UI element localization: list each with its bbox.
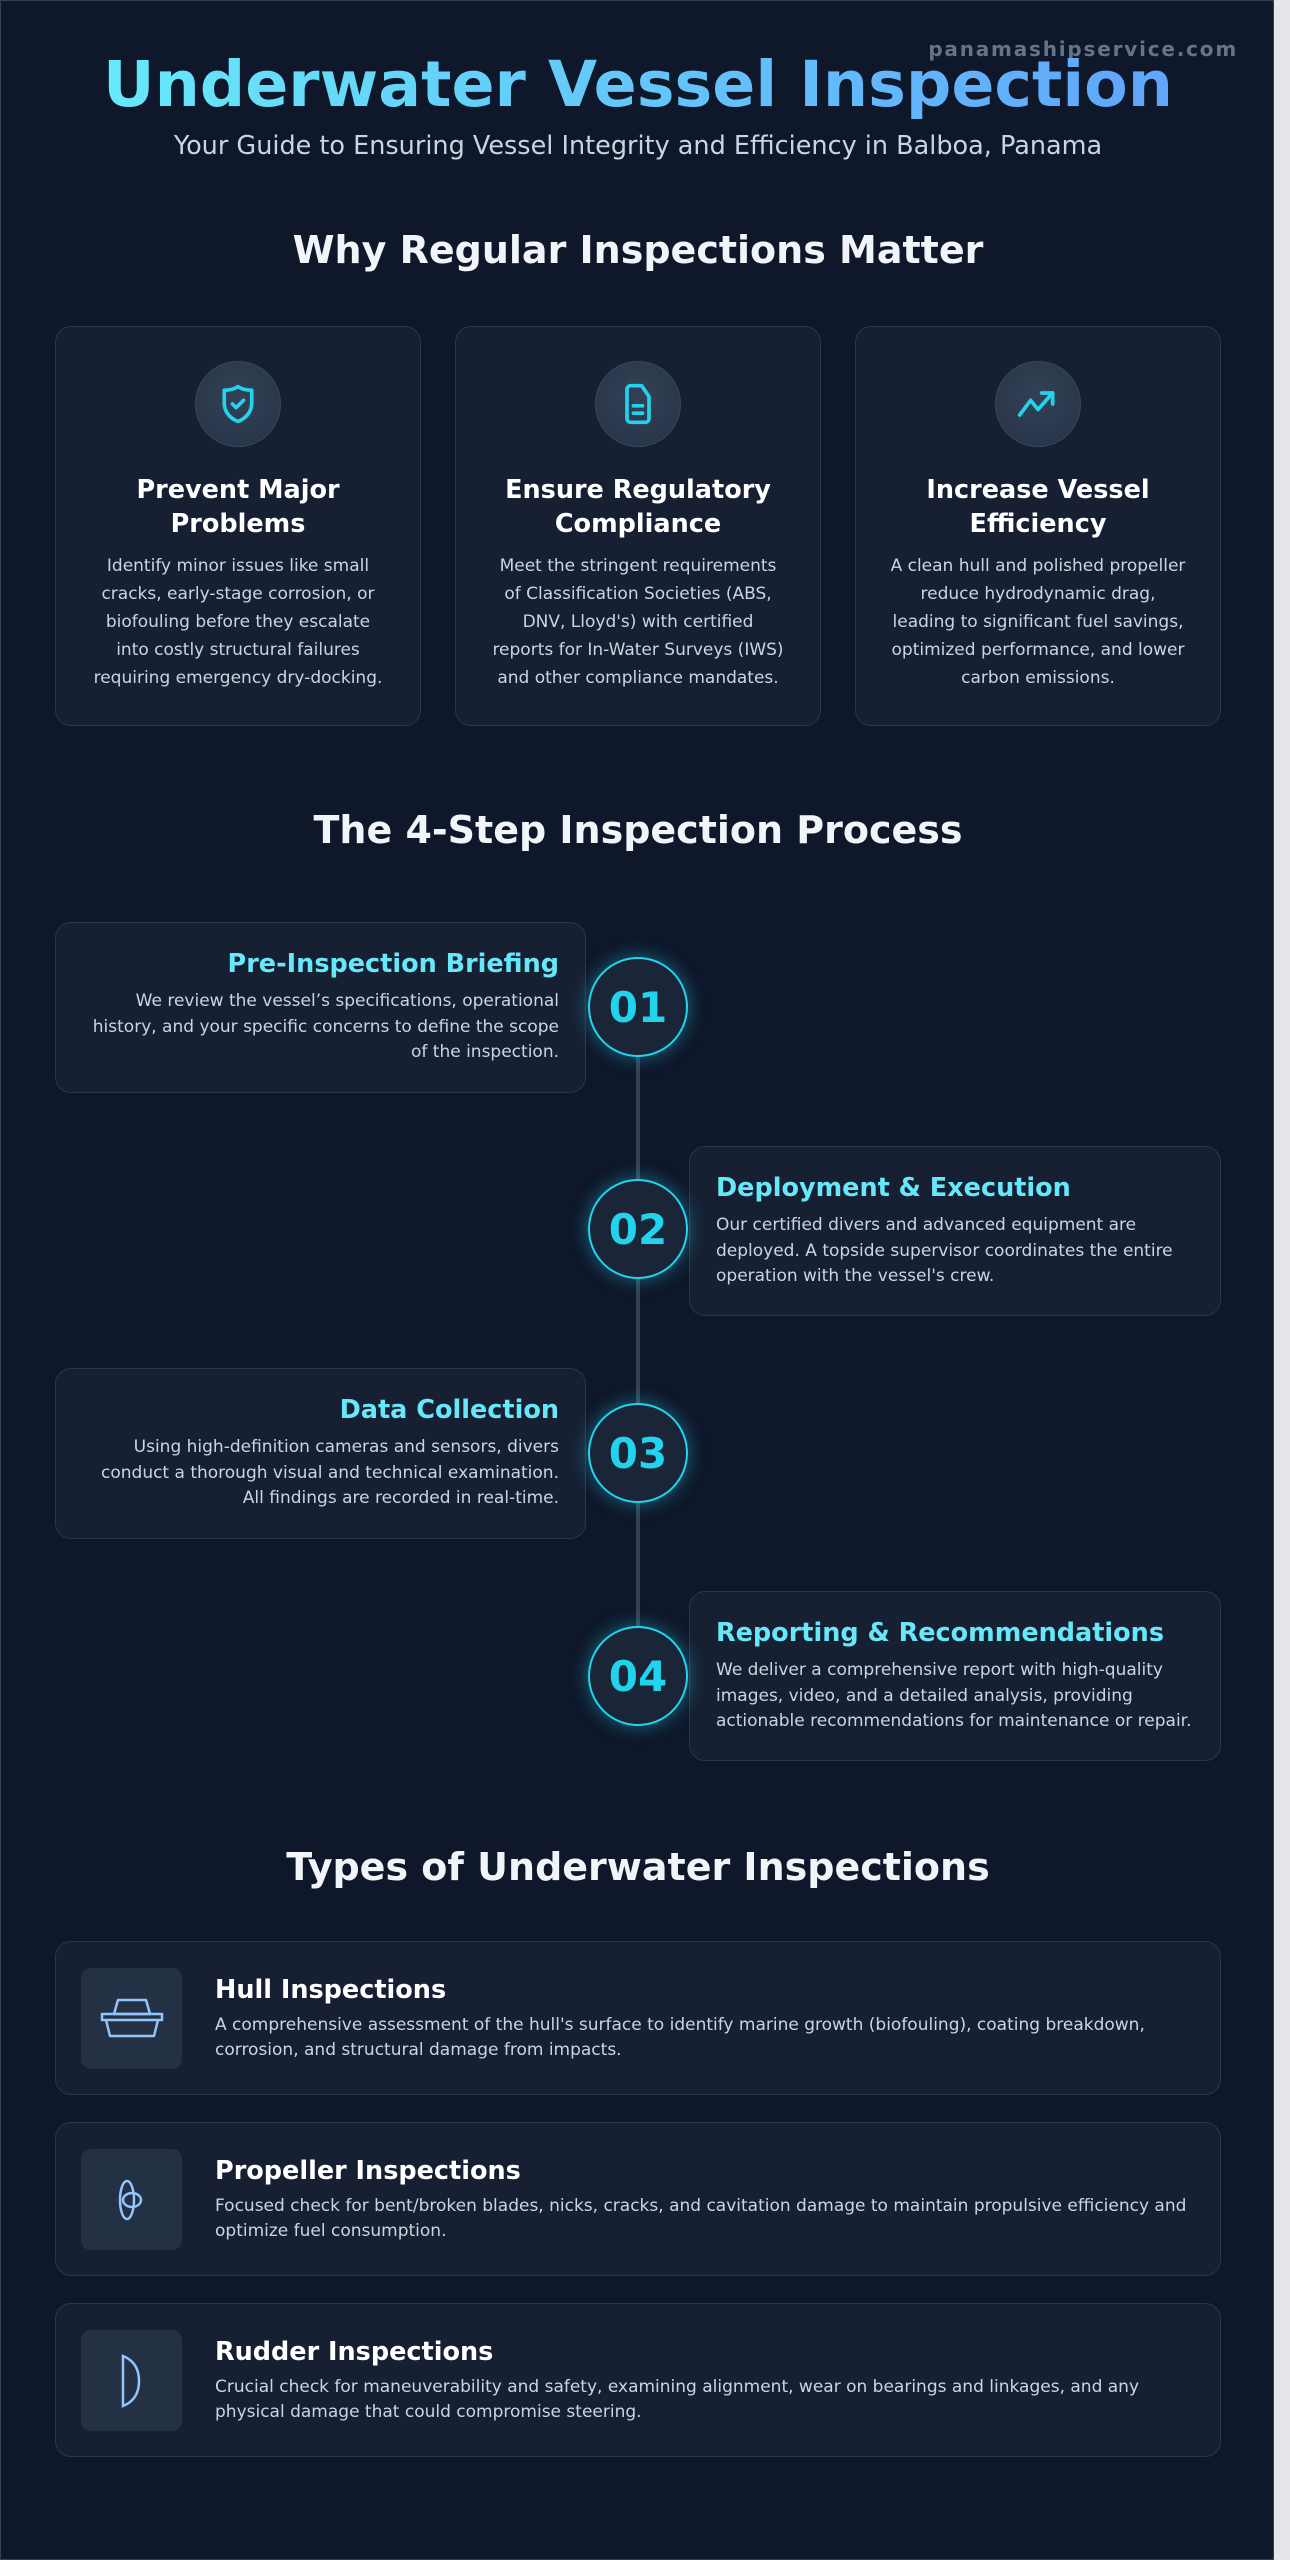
timeline line	[636, 1007, 640, 1676]
panel: compliance	[455, 326, 821, 726]
step 2 card: Deployment & Execution	[716, 1173, 1071, 1203]
step 2 card: Our certified divers and advanced equipment are deployed. A topside supervisor coordinates the entire operation with the vessel's crew.	[716, 1215, 1173, 1286]
step 4 number: 04	[609, 1652, 667, 1700]
card text: Identify minor issues like small	[107, 556, 369, 576]
panel: propeller: Focused check for bent/broken blades, nicks, cracks, and cavitation damage to maintain propulsive efficiency and optimize fuel consumption.	[215, 2196, 1186, 2241]
title: Underwater Vessel Inspection	[103, 47, 1173, 121]
heading: types: Types of Underwater Inspections	[286, 1845, 990, 1889]
card title: Compliance	[555, 509, 721, 539]
step 1 number: 01	[609, 982, 667, 1032]
step 4 card: We deliver a comprehensive report with high-quality images, video, and a detailed analysis, providing actionable recommendations for maintenance or repair.	[716, 1660, 1192, 1731]
step 1 card: Pre-Inspection Briefing	[228, 949, 559, 979]
panel: hull	[55, 1941, 1221, 2095]
step 4 number	[588, 1626, 688, 1726]
card title	[926, 475, 1150, 539]
icon: propeller	[81, 2149, 182, 2250]
icon: hull	[81, 1968, 182, 2069]
card text	[94, 556, 382, 688]
card title: Ensure Regulatory	[505, 475, 771, 505]
step 2 card	[689, 1146, 1221, 1316]
panel: efficiency	[855, 326, 1221, 726]
panel: prevent problems	[55, 326, 421, 726]
icon: trend up	[995, 361, 1081, 447]
card text: requiring emergency dry-docking.	[94, 668, 382, 688]
card text: of Classification Societies (ABS,	[504, 584, 772, 604]
card text: A clean hull and polished propeller	[891, 556, 1185, 576]
panel: rudder: Crucial check for maneuverability and safety, examining alignment, wear on bearings and linkages, and any physical damage that could compromise steering.	[215, 2377, 1139, 2422]
icon: rudder	[81, 2330, 182, 2431]
step 1 card: We review the vessel’s specifications, operational history, and your specific concerns to define the scope of the inspection.	[93, 991, 559, 1062]
heading: process: The 4-Step Inspection Process	[313, 808, 963, 852]
panel: hull: A comprehensive assessment of the hull's surface to identify marine growth (biofouling), coating breakdown, corrosion, and structural damage from impacts.	[215, 2015, 1145, 2060]
card title	[136, 475, 340, 539]
card text: reports for In-Water Surveys (IWS)	[492, 640, 784, 660]
card text	[492, 556, 784, 688]
card text: into costly structural failures	[116, 640, 360, 660]
card text: reduce hydrodynamic drag,	[921, 584, 1155, 604]
card title: Efficiency	[970, 509, 1106, 539]
step 2 number: 02	[609, 1204, 667, 1254]
panel: propeller: Propeller Inspections	[215, 2156, 521, 2186]
panel: hull: Hull Inspections	[215, 1975, 446, 2005]
step 3 number	[588, 1403, 688, 1503]
card text: cracks, early-stage corrosion, or	[101, 584, 375, 604]
card text: biofouling before they escalate	[106, 612, 370, 632]
card text	[890, 556, 1186, 688]
step 3 number: 03	[609, 1428, 667, 1478]
card text: Meet the stringent requirements	[500, 556, 776, 576]
step 4 card: Reporting & Recommendations	[716, 1618, 1164, 1648]
step 1 number	[588, 957, 688, 1057]
card text: and other compliance mandates.	[497, 668, 779, 688]
card text: DNV, Lloyd's) with certified	[523, 612, 753, 632]
panel: rudder	[55, 2303, 1221, 2457]
step 3 card	[55, 1368, 586, 1539]
card title: Prevent Major	[136, 475, 340, 505]
icon: document	[595, 361, 681, 447]
step 4 card	[689, 1591, 1221, 1761]
step 3 card: Using high-definition cameras and sensors, divers conduct a thorough visual and technical examination. All findings are recorded in real-time.	[101, 1437, 559, 1508]
panel: rudder: Rudder Inspections	[215, 2337, 493, 2367]
panel: propeller	[55, 2122, 1221, 2276]
card text: optimized performance, and lower	[892, 640, 1184, 660]
step 2 number	[588, 1179, 688, 1279]
card text: leading to significant fuel savings,	[893, 612, 1183, 632]
watermark: panamashipservice.com	[928, 37, 1238, 61]
card title: Increase Vessel	[926, 475, 1150, 505]
card title	[505, 475, 771, 539]
heading: why: Why Regular Inspections Matter	[293, 228, 983, 272]
step 3 card: Data Collection	[340, 1395, 559, 1425]
card title: Problems	[171, 509, 305, 539]
card text: carbon emissions.	[961, 668, 1115, 688]
subtitle: Your Guide to Ensuring Vessel Integrity and Efficiency in Balboa, Panama	[174, 131, 1102, 161]
icon: shield	[195, 361, 281, 447]
step 1 card	[55, 922, 586, 1093]
